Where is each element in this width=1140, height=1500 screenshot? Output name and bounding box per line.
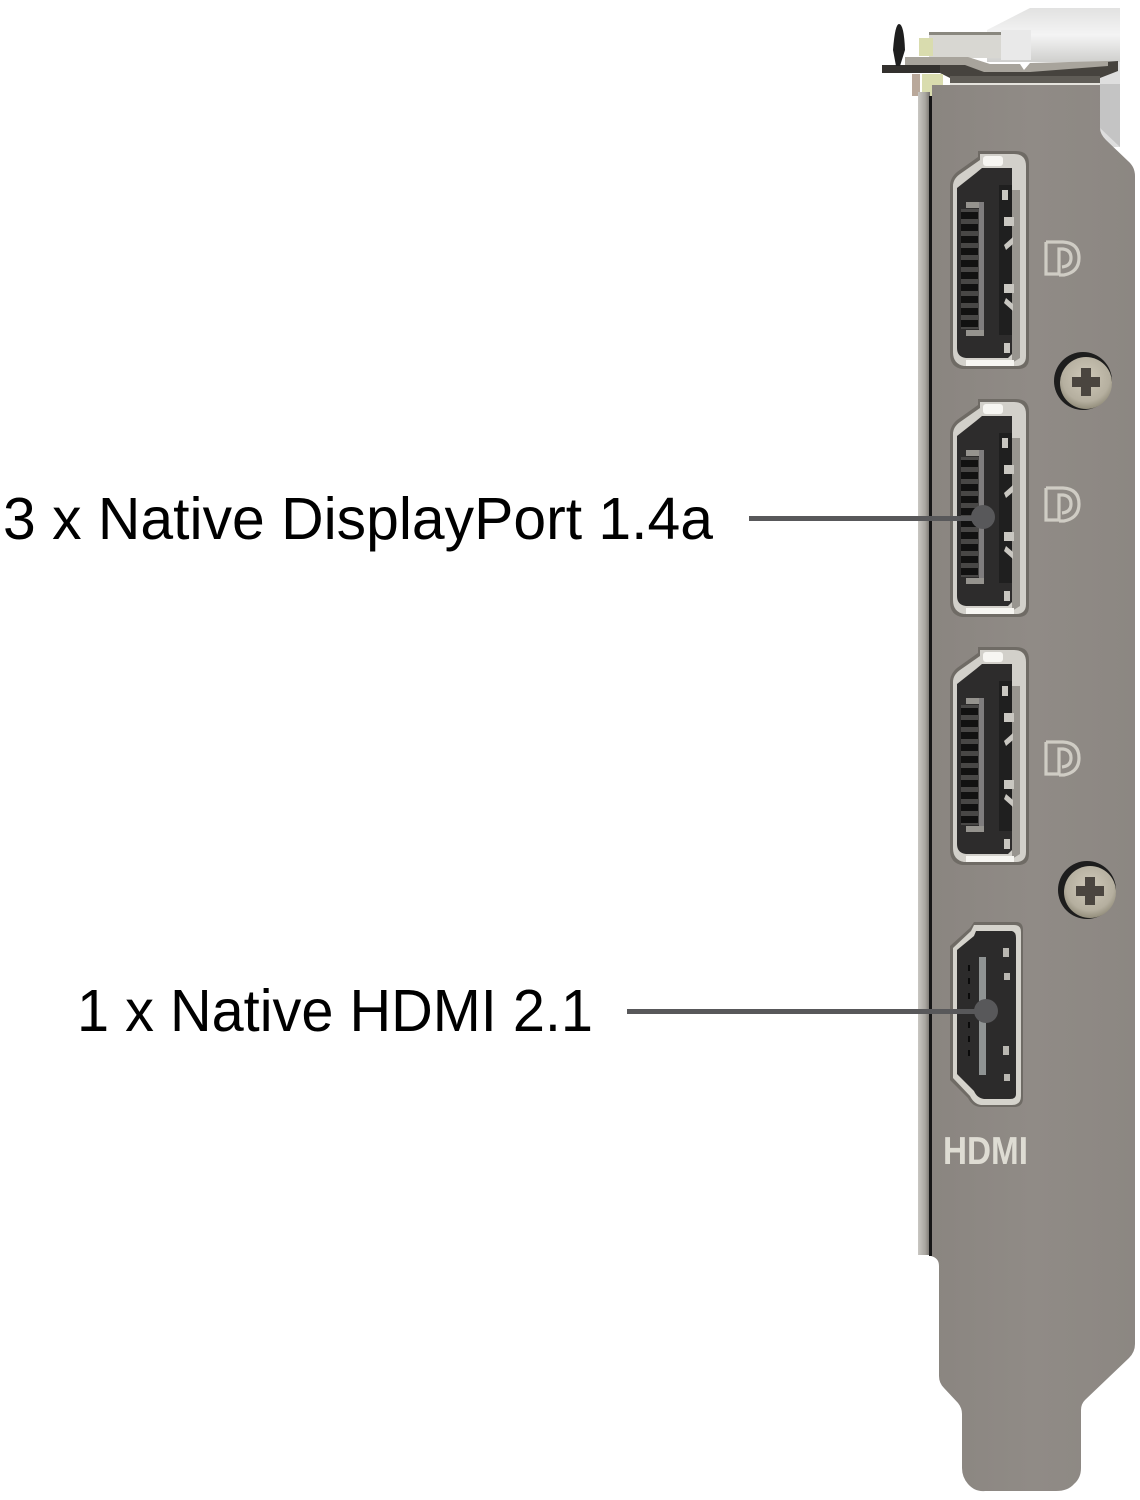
port: HDMI [950,922,1023,1107]
callout: DisplayPort label: 3 x Native DisplayPort 1.4a [3,486,713,552]
icon: screw upper [1054,352,1112,410]
icon: screw lower [1058,861,1116,919]
leader line: DisplayPort callout [749,505,995,529]
leader line: HDMI callout [627,999,998,1023]
bracket plate [918,85,1135,1491]
label: HDMI silkscreen: HDMI [943,1130,1028,1173]
port: DisplayPort 1 [950,151,1029,369]
icon: DisplayPort logo 2 [1046,488,1079,521]
port: DisplayPort 3 [950,647,1029,865]
icon: DisplayPort logo 1 [1046,242,1079,275]
icon: DisplayPort logo 3 [1046,742,1079,775]
bracket top latch assembly [882,8,1120,147]
callout: HDMI label: 1 x Native HDMI 2.1 [77,978,593,1044]
port: DisplayPort 2 [950,399,1029,617]
